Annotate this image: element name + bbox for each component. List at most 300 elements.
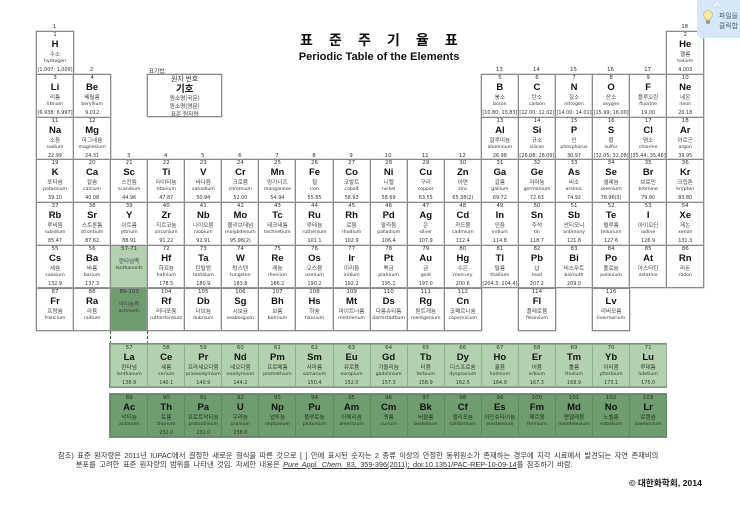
element: Rn	[666, 245, 704, 288]
element: Cl: chlorine	[639, 145, 657, 150]
lanthanoids placeholder	[110, 245, 148, 288]
element: Pb: 82	[533, 246, 540, 252]
element: W: W	[236, 253, 245, 264]
element: Pm: 프로메튬	[267, 363, 288, 371]
element: Dy: 디스프로슘	[450, 363, 476, 371]
element: Ge	[518, 159, 556, 203]
element: Fm: 페르뮴	[529, 413, 545, 421]
element: Cl: [35.44; 35.46]	[631, 153, 666, 159]
element: Ba: 56	[89, 246, 96, 252]
element: Al: 알루미늄	[490, 136, 510, 144]
element: Na: Na	[49, 125, 61, 136]
group number 12: 12	[459, 152, 466, 158]
element: Ni: nickel	[382, 187, 395, 192]
element: U: uranium	[231, 422, 250, 427]
element: No: 노벨륨	[603, 413, 619, 421]
element: Mt: 마이트너륨	[339, 306, 364, 314]
element: I: I	[647, 210, 649, 221]
element: Ne: neon	[679, 102, 691, 107]
element: Cr	[221, 159, 259, 203]
element: Rb	[36, 202, 74, 246]
footnote: line one: 참조) 표준 원자량은 2011년 IUPAC에서 결정한 새로운 형식을 따른 것으로 [ ] 안에 표시된 숫자는 2 종류 이상의 안정한 동위원소가 존재하는 경우에 지각 시료에서 발견되는 자연 존재비의	[58, 451, 658, 460]
element: Nb: niobium	[194, 230, 213, 235]
element: Pu: 94	[311, 395, 318, 401]
element: Rb: Rb	[49, 210, 61, 221]
element: Fr: 87	[52, 288, 59, 294]
element: Ta: tantalum	[193, 273, 214, 278]
element: Mg: 마그네슘	[82, 136, 102, 144]
element: Pa: 231.0	[196, 430, 210, 436]
element: Kr: Kr	[680, 167, 690, 178]
element: Nd: 60	[237, 345, 244, 351]
element: U: 238.0	[233, 430, 247, 436]
lanthanoids placeholder: 란타넘족	[119, 257, 139, 265]
element: H: [1.007; 1.009]	[38, 67, 73, 73]
element: Cf: Cf	[458, 402, 468, 413]
element: Xe: 54	[682, 203, 689, 209]
element: Cs: 55	[52, 246, 59, 252]
element: Ta: 180.9	[196, 281, 210, 287]
element: Y: yttrium	[121, 230, 138, 235]
element: H: 수소	[50, 50, 60, 58]
element: Lu: lutetium	[638, 372, 658, 377]
element: Tm: thulium	[565, 372, 583, 377]
element: Mt: meitnerium	[338, 316, 365, 320]
element: In	[481, 202, 519, 246]
element: Br: 브로민	[640, 178, 656, 186]
element: Bk: 버클륨	[418, 413, 433, 421]
element: Er: 68	[533, 345, 540, 351]
element: Ag: silver	[419, 230, 432, 235]
element: Tl: thallium	[490, 273, 509, 278]
element: Bi: bismuth	[565, 273, 583, 278]
element: Cm: Cm	[381, 402, 396, 413]
element: Ar: Ar	[680, 125, 690, 136]
element: Li: Li	[51, 82, 59, 93]
element: H: H	[52, 39, 58, 50]
element: Sc: scandium	[118, 187, 140, 192]
element: Ir: Ir	[348, 253, 355, 264]
element: Yb	[592, 344, 630, 387]
element: S: [32.05; 32.08]	[594, 153, 629, 159]
element: Bk: berkelium	[414, 422, 437, 427]
element: Fl: 114	[532, 288, 542, 294]
element: Tm	[555, 344, 593, 387]
element: La: 란타넘	[121, 363, 137, 371]
element: Tc: 테크네튬	[267, 221, 288, 229]
element: Sr: 87.62	[85, 238, 99, 244]
element: Ne	[666, 74, 704, 118]
element: Ru: ruthenium	[302, 230, 327, 235]
element: Tl: Tl	[496, 253, 504, 264]
element: Lr	[629, 394, 667, 437]
element: Ga: Ga	[494, 167, 506, 178]
element: Pd: 팔라듐	[381, 221, 396, 229]
element: Rf: Rf	[161, 296, 171, 306]
element: Ra	[73, 288, 111, 331]
element: Fm	[518, 394, 556, 437]
element: At: 아스타틴	[638, 264, 658, 272]
element: V: 바나듐	[196, 178, 211, 186]
element: Rg	[407, 288, 445, 331]
group number 1: 1	[53, 24, 56, 30]
element: Lv: 리버모륨	[601, 306, 621, 314]
element: Au	[407, 245, 445, 288]
element: Li: [6.938; 6.997]	[38, 110, 73, 116]
tooltip text: 클릭합	[719, 20, 738, 30]
element: Rb: 85.47	[48, 238, 62, 244]
element: Ge: 32	[533, 160, 540, 166]
element: Te	[592, 202, 630, 246]
element: Rg: 뢴트게늄	[415, 306, 436, 314]
element: Co: 27	[348, 160, 355, 166]
element: Lr: 103	[643, 395, 653, 401]
element: Db: 105	[198, 288, 209, 294]
element: I: 53	[645, 203, 652, 209]
element: Eu: Eu	[345, 352, 358, 363]
element: Al: 13	[496, 118, 503, 124]
element: W: tungsten	[230, 273, 251, 278]
element: Lv: 116	[606, 288, 616, 294]
element: H	[36, 31, 74, 75]
element: In: 114.8	[493, 238, 507, 244]
element: Sb: 51	[570, 203, 578, 209]
element: Re	[258, 245, 296, 288]
element: Si	[518, 117, 556, 160]
element: B: boron	[493, 102, 507, 107]
element: Es: 99	[496, 395, 503, 401]
element: No: 102	[606, 395, 616, 401]
element: H: hydrogen	[44, 59, 66, 64]
element: Zn: Zn	[457, 167, 469, 178]
actinoids placeholder: actinoids	[119, 308, 140, 314]
element: Yb: Yb	[605, 352, 617, 363]
element: Ne: 10	[682, 75, 689, 81]
element: Lu: 175.0	[641, 380, 655, 386]
element: C: carbon	[529, 102, 545, 107]
element: Tm: 69	[570, 345, 577, 351]
element: At	[629, 245, 667, 288]
group number 8: 8	[312, 152, 316, 158]
element: Dy: dysprosium	[449, 372, 476, 377]
element: Sr: 스트론튬	[82, 221, 102, 229]
element: Rh: 로듐	[346, 221, 357, 229]
element: Fr: 프랑슘	[47, 306, 63, 314]
element: In: In	[496, 210, 504, 221]
element: Mo: 95.96(2)	[230, 238, 251, 244]
element: Tc: technetium	[264, 230, 291, 235]
element: La	[110, 344, 148, 387]
element: Hs: hassium	[305, 316, 324, 320]
element: He: helium	[677, 59, 693, 64]
element: Am: Am	[344, 402, 359, 413]
element: Co: 58.93	[345, 195, 359, 201]
element: P	[555, 117, 593, 160]
element: U: 92	[237, 395, 244, 401]
element: Mo: 42	[237, 203, 244, 209]
element: Mo	[221, 202, 259, 246]
element: Cs: Cs	[49, 253, 61, 264]
element: Ar: 39.95	[678, 153, 692, 159]
element: Bi	[555, 245, 593, 288]
element: Cm: 퀴륨	[383, 413, 394, 421]
element: Fe: iron	[310, 187, 319, 192]
element: Mn: 54.94	[270, 195, 284, 201]
element: Au: 197.0	[419, 281, 433, 287]
element: Br: 35	[645, 160, 652, 166]
element: Kr: 83.80	[678, 195, 692, 201]
element: Ru: 루테늄	[307, 221, 322, 229]
element: Li: lithium	[47, 102, 63, 107]
element: O: O	[607, 82, 615, 93]
element: Sr: Sr	[87, 210, 97, 221]
element: Mn: 망가니즈	[267, 178, 288, 186]
element: Rh: Rh	[345, 210, 358, 221]
element: Zr: zirconium	[155, 230, 178, 235]
element: Po: Po	[605, 253, 617, 264]
element: C: 탄소	[532, 93, 542, 101]
element: Ir: 이리듐	[344, 264, 359, 272]
element: Os: osmium	[305, 273, 324, 278]
element: K: 19	[52, 160, 59, 166]
element: Rn: radon	[678, 273, 692, 278]
group number 7: 7	[275, 152, 279, 158]
element: B: 붕소	[495, 93, 505, 101]
actinoids placeholder: 악티늄족	[119, 300, 139, 308]
element: Tl: [204.3; 204.4]	[482, 281, 517, 287]
element: Co: 코발트	[344, 178, 359, 186]
element: Ac: 89	[126, 395, 133, 401]
element: Tl: 81	[496, 246, 503, 252]
group number 17: 17	[644, 67, 651, 73]
element: C: 6	[535, 75, 539, 81]
element: Pd	[370, 202, 408, 246]
element: Zn: 아연	[458, 178, 468, 186]
element: Ra: 88	[89, 288, 96, 294]
element: Er	[518, 344, 556, 387]
tooltip text: 파일을	[719, 10, 738, 20]
element: Ho: Ho	[494, 352, 506, 363]
element: Pa: 프로트악티늄	[188, 413, 219, 421]
element: Pu: 플루토늄	[304, 413, 325, 421]
group number 16: 16	[607, 67, 614, 73]
element: W: 74	[237, 246, 244, 252]
element: Sb: antimony	[563, 230, 585, 235]
legend caption: 표기법:	[149, 67, 166, 75]
element: Cd: 48	[459, 203, 466, 209]
group number 3: 3	[127, 152, 130, 158]
element: Te: Te	[606, 210, 616, 221]
element: Ba: barium	[84, 273, 100, 278]
element: Cu: copper	[418, 187, 434, 192]
element: Pm	[258, 344, 296, 387]
element: Ni: 58.69	[382, 195, 396, 201]
element: Pd: 46	[385, 203, 392, 209]
element: Bh: bohrium	[268, 316, 287, 320]
element: Ge: germanium	[524, 187, 550, 192]
element: Md: mendelevium	[558, 422, 590, 427]
copyright: © 대한화학회, 2014	[629, 478, 702, 488]
icon: caret	[714, 2, 720, 6]
element: Sn: 주석	[532, 221, 542, 229]
element: Cr: 52.00	[233, 195, 247, 201]
element: Hg: Hg	[456, 253, 469, 264]
element: Sr: strontium	[81, 230, 103, 235]
element: Tc	[258, 202, 296, 246]
group number 11: 11	[422, 152, 429, 158]
element: Am: 95	[348, 395, 355, 401]
element: Th: 232.0	[159, 430, 173, 436]
element: As: 33	[570, 160, 578, 166]
element: Bk: 97	[422, 395, 429, 401]
element: Sr: 38	[89, 203, 96, 209]
element: B: [10.80; 10.83]	[482, 110, 517, 116]
element: V: V	[200, 167, 206, 178]
element: Hg: 80	[459, 246, 466, 252]
element: Bk	[407, 394, 445, 437]
element: Sr	[73, 202, 111, 246]
element: Hf: 하프늄	[158, 264, 174, 272]
element: Eu: 152.0	[345, 380, 359, 386]
element: Ge: 72.63	[530, 195, 544, 201]
element: Pr: Pr	[198, 352, 208, 363]
element: K	[36, 159, 74, 203]
element: Se	[592, 159, 630, 203]
element: Os: 오스뮴	[307, 264, 322, 272]
element: Zr: 91.22	[159, 238, 173, 244]
element: Po: 84	[608, 246, 615, 252]
element: Ca: calcium	[83, 187, 101, 192]
element: C: [12.00; 12.02]	[519, 110, 554, 116]
element: Mt: Mt	[346, 296, 357, 306]
element: Er: erbium	[529, 372, 545, 377]
element: Sm: 62	[311, 345, 318, 351]
element: Ru: 44	[311, 203, 318, 209]
element: Np: neptunium	[265, 422, 290, 427]
element: F: F	[645, 82, 651, 93]
element: Fl: Fl	[533, 296, 541, 306]
element: Np: 넵투늄	[270, 413, 285, 421]
group number 13: 13	[496, 67, 503, 73]
element: Mt: 109	[346, 288, 357, 294]
element: Sb: 안티모니	[564, 221, 584, 229]
element: Pm: promethium	[263, 372, 292, 377]
element: Nd: neodymium	[227, 372, 254, 377]
element: Pd: palladium	[377, 230, 400, 235]
element: F: 9	[646, 75, 650, 81]
element: Tb: terbium	[417, 372, 435, 377]
element: Re: rhenium	[268, 273, 287, 278]
element: Rh: rhodium	[342, 230, 361, 235]
element: Am	[333, 394, 371, 437]
element: W: 183.8	[233, 281, 247, 287]
element: Pd: 106.4	[382, 238, 396, 244]
element: Rg: 111	[420, 288, 431, 294]
element: Cm: 96	[385, 395, 392, 401]
element: Th: thorium	[157, 422, 175, 427]
element: Kr: krypton	[676, 187, 694, 192]
element: Lr: 로렌슘	[640, 413, 656, 421]
element: Na: 22.99	[48, 153, 62, 159]
element: La: 138.9	[122, 380, 136, 386]
legend box: how to read a cell: 원소명(국문)	[170, 93, 200, 102]
element: Md: Md	[567, 402, 581, 413]
element: Au: Au	[419, 253, 432, 264]
element: Pt: Pt	[384, 253, 393, 264]
element: Ni	[370, 159, 408, 203]
element: O: 산소	[606, 93, 616, 101]
element: Se: 34	[608, 160, 615, 166]
element: Na: 소듐	[50, 136, 60, 144]
element: Re: 75	[274, 246, 281, 252]
element: Tb	[407, 344, 445, 387]
element: Ac: actinium	[119, 422, 139, 427]
element: Mg: 24.31	[85, 153, 99, 159]
element: Ta: Ta	[198, 253, 208, 264]
element: Er: 어븀	[532, 363, 542, 371]
element: Se: 셀레늄	[603, 178, 619, 186]
element: Ti: 22	[163, 160, 170, 166]
element: Ti: Ti	[162, 167, 170, 178]
element: Cs: 세슘	[50, 264, 60, 272]
group number 2: 2	[90, 67, 93, 73]
element: Eu: 63	[348, 345, 355, 351]
element: Pr: 140.9	[196, 380, 210, 386]
element: Au: 금	[423, 264, 428, 272]
element: Eu: europium	[340, 372, 363, 377]
element: Al: Al	[495, 125, 505, 136]
element: I: iodine	[641, 230, 655, 235]
element: B: 5	[498, 75, 502, 81]
element: Sn: tin	[534, 230, 540, 235]
element: Ce: 세륨	[161, 363, 171, 371]
element: Li: 리튬	[50, 93, 60, 101]
element: Si: [28.08; 28.09]	[519, 153, 554, 159]
element: Gd: 157.3	[382, 380, 396, 386]
element: Re: Re	[271, 253, 284, 264]
element: Ag: 47	[422, 203, 429, 209]
element: Ds: darmstadtium	[372, 316, 405, 320]
group number 5: 5	[201, 152, 205, 158]
element: Mo: molybdenum	[225, 230, 256, 235]
element: No: nobelium	[600, 422, 622, 427]
element: Nd: Nd	[234, 352, 247, 363]
element: Cf: 캘리포늄	[452, 413, 473, 421]
element: Sm: samarium	[303, 372, 326, 377]
element: As	[555, 159, 593, 203]
element: Cs	[36, 245, 74, 288]
element: Rn: 라돈	[680, 264, 690, 272]
element: Md: 멘델레븀	[564, 413, 584, 421]
element: Hf: 72	[163, 246, 170, 252]
element: Be: 베릴륨	[84, 93, 100, 101]
element: Bh: 107	[272, 288, 283, 294]
element: Y	[110, 202, 148, 246]
element: Sb	[555, 202, 593, 246]
element: Ag: Ag	[419, 210, 432, 221]
element: Pr	[184, 344, 222, 387]
element: Ce: 58	[163, 345, 170, 351]
element: Np: Np	[271, 402, 284, 413]
element: Kr: 36	[682, 160, 689, 166]
element: Th	[147, 394, 185, 437]
element: V: 50.94	[196, 195, 210, 201]
element: Y: 88.91	[122, 238, 136, 244]
element: Na: sodium	[47, 145, 64, 150]
element: Lu	[629, 344, 667, 387]
element: Sc	[110, 159, 148, 203]
element: Ho: 67	[496, 345, 503, 351]
